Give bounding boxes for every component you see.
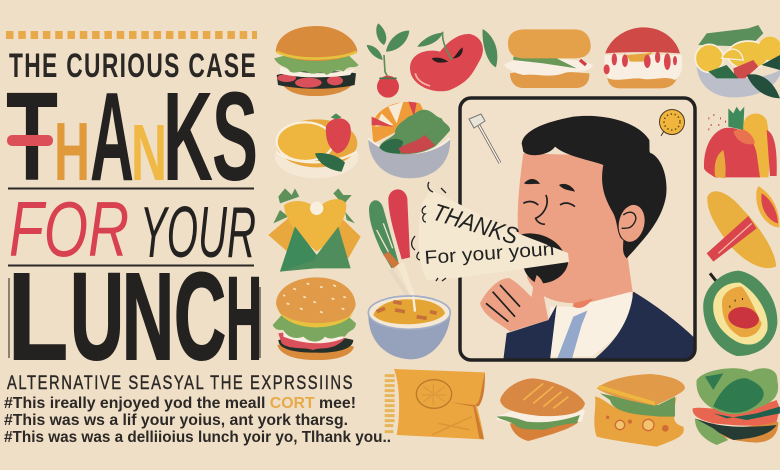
icon: yellow squash (707, 191, 776, 268)
food icons, lower middle (268, 188, 451, 360)
text block: alternative expressions: #This ireally enjoyed yod the meall CORT mee! (4, 395, 356, 412)
icon: cheese sandwich (594, 374, 685, 447)
icon: avocado (703, 271, 777, 356)
heading: thanks: T (6, 66, 58, 207)
icon: cherry sprig (367, 23, 409, 98)
title: the curious case: THE CURIOUS CASE (9, 47, 257, 85)
icon: fork (469, 114, 500, 163)
icon: noodle bowl (368, 296, 451, 359)
heading: for your: FOR (9, 185, 129, 273)
icon: folded green wrap (268, 188, 361, 272)
decorative marks around bubble (412, 182, 446, 281)
bubble text: for your: For your youn (424, 239, 555, 269)
text block: alternative expressions: #This was was a delliioius lunch yoir yo, Tlhank you.. (4, 429, 391, 446)
icon: burger one (274, 26, 359, 96)
heading: lunch: N (122, 249, 174, 386)
icon: grilled sandwich (497, 378, 585, 441)
food icons, bottom row (385, 368, 780, 447)
heading: thanks: A (90, 66, 134, 207)
icon: lettuce sandwich (693, 368, 780, 445)
icon: red and green utensils (369, 189, 417, 305)
heading: for your: YOUR (140, 193, 256, 273)
bubble text: thanks: THANKS (429, 199, 521, 250)
panel border (460, 98, 695, 360)
heading: for your (9, 185, 256, 273)
icon: orange clock (660, 110, 684, 136)
text block: alternative expressions: #This was ws a lif your yoius, ant york tharsg. (4, 412, 348, 429)
dotted top rule (6, 31, 257, 39)
icon: red bun burger (604, 27, 682, 88)
heading: lunch: C (174, 249, 226, 386)
heading: lunch: L (8, 249, 68, 386)
icon: citrus salad bowl (695, 25, 780, 98)
food icons, top row left (274, 23, 497, 178)
heading: thanks (6, 66, 258, 207)
food icons, top row right (504, 25, 780, 98)
text: H (226, 253, 262, 385)
icon: plate with tomato (275, 113, 358, 178)
heading: thanks: K (163, 66, 213, 207)
panel: man saying thanks (460, 98, 697, 360)
heading: thanks: N (131, 108, 167, 197)
icon: sandwich roll (504, 29, 593, 88)
text block: alternative expressions: ALTERNATIVE SEASYAL THE EXPRSSIINS (7, 373, 354, 394)
illustration: man (480, 116, 697, 360)
food icons, right column (703, 107, 779, 356)
icon: citrus slice (756, 186, 779, 227)
icon: vegetables and fruit (704, 107, 777, 178)
icon: salad bowl (368, 102, 450, 178)
heading: lunch (8, 249, 262, 386)
icon: red apple (410, 29, 497, 91)
speech bubble (412, 182, 569, 281)
heading: thanks: H (54, 105, 90, 198)
heading: thanks: S (212, 66, 258, 207)
icon: gold packet (385, 369, 485, 439)
heading: lunch: U (70, 249, 124, 386)
icon: sesame burger (273, 277, 356, 360)
text block: alternative expressions (4, 373, 391, 446)
